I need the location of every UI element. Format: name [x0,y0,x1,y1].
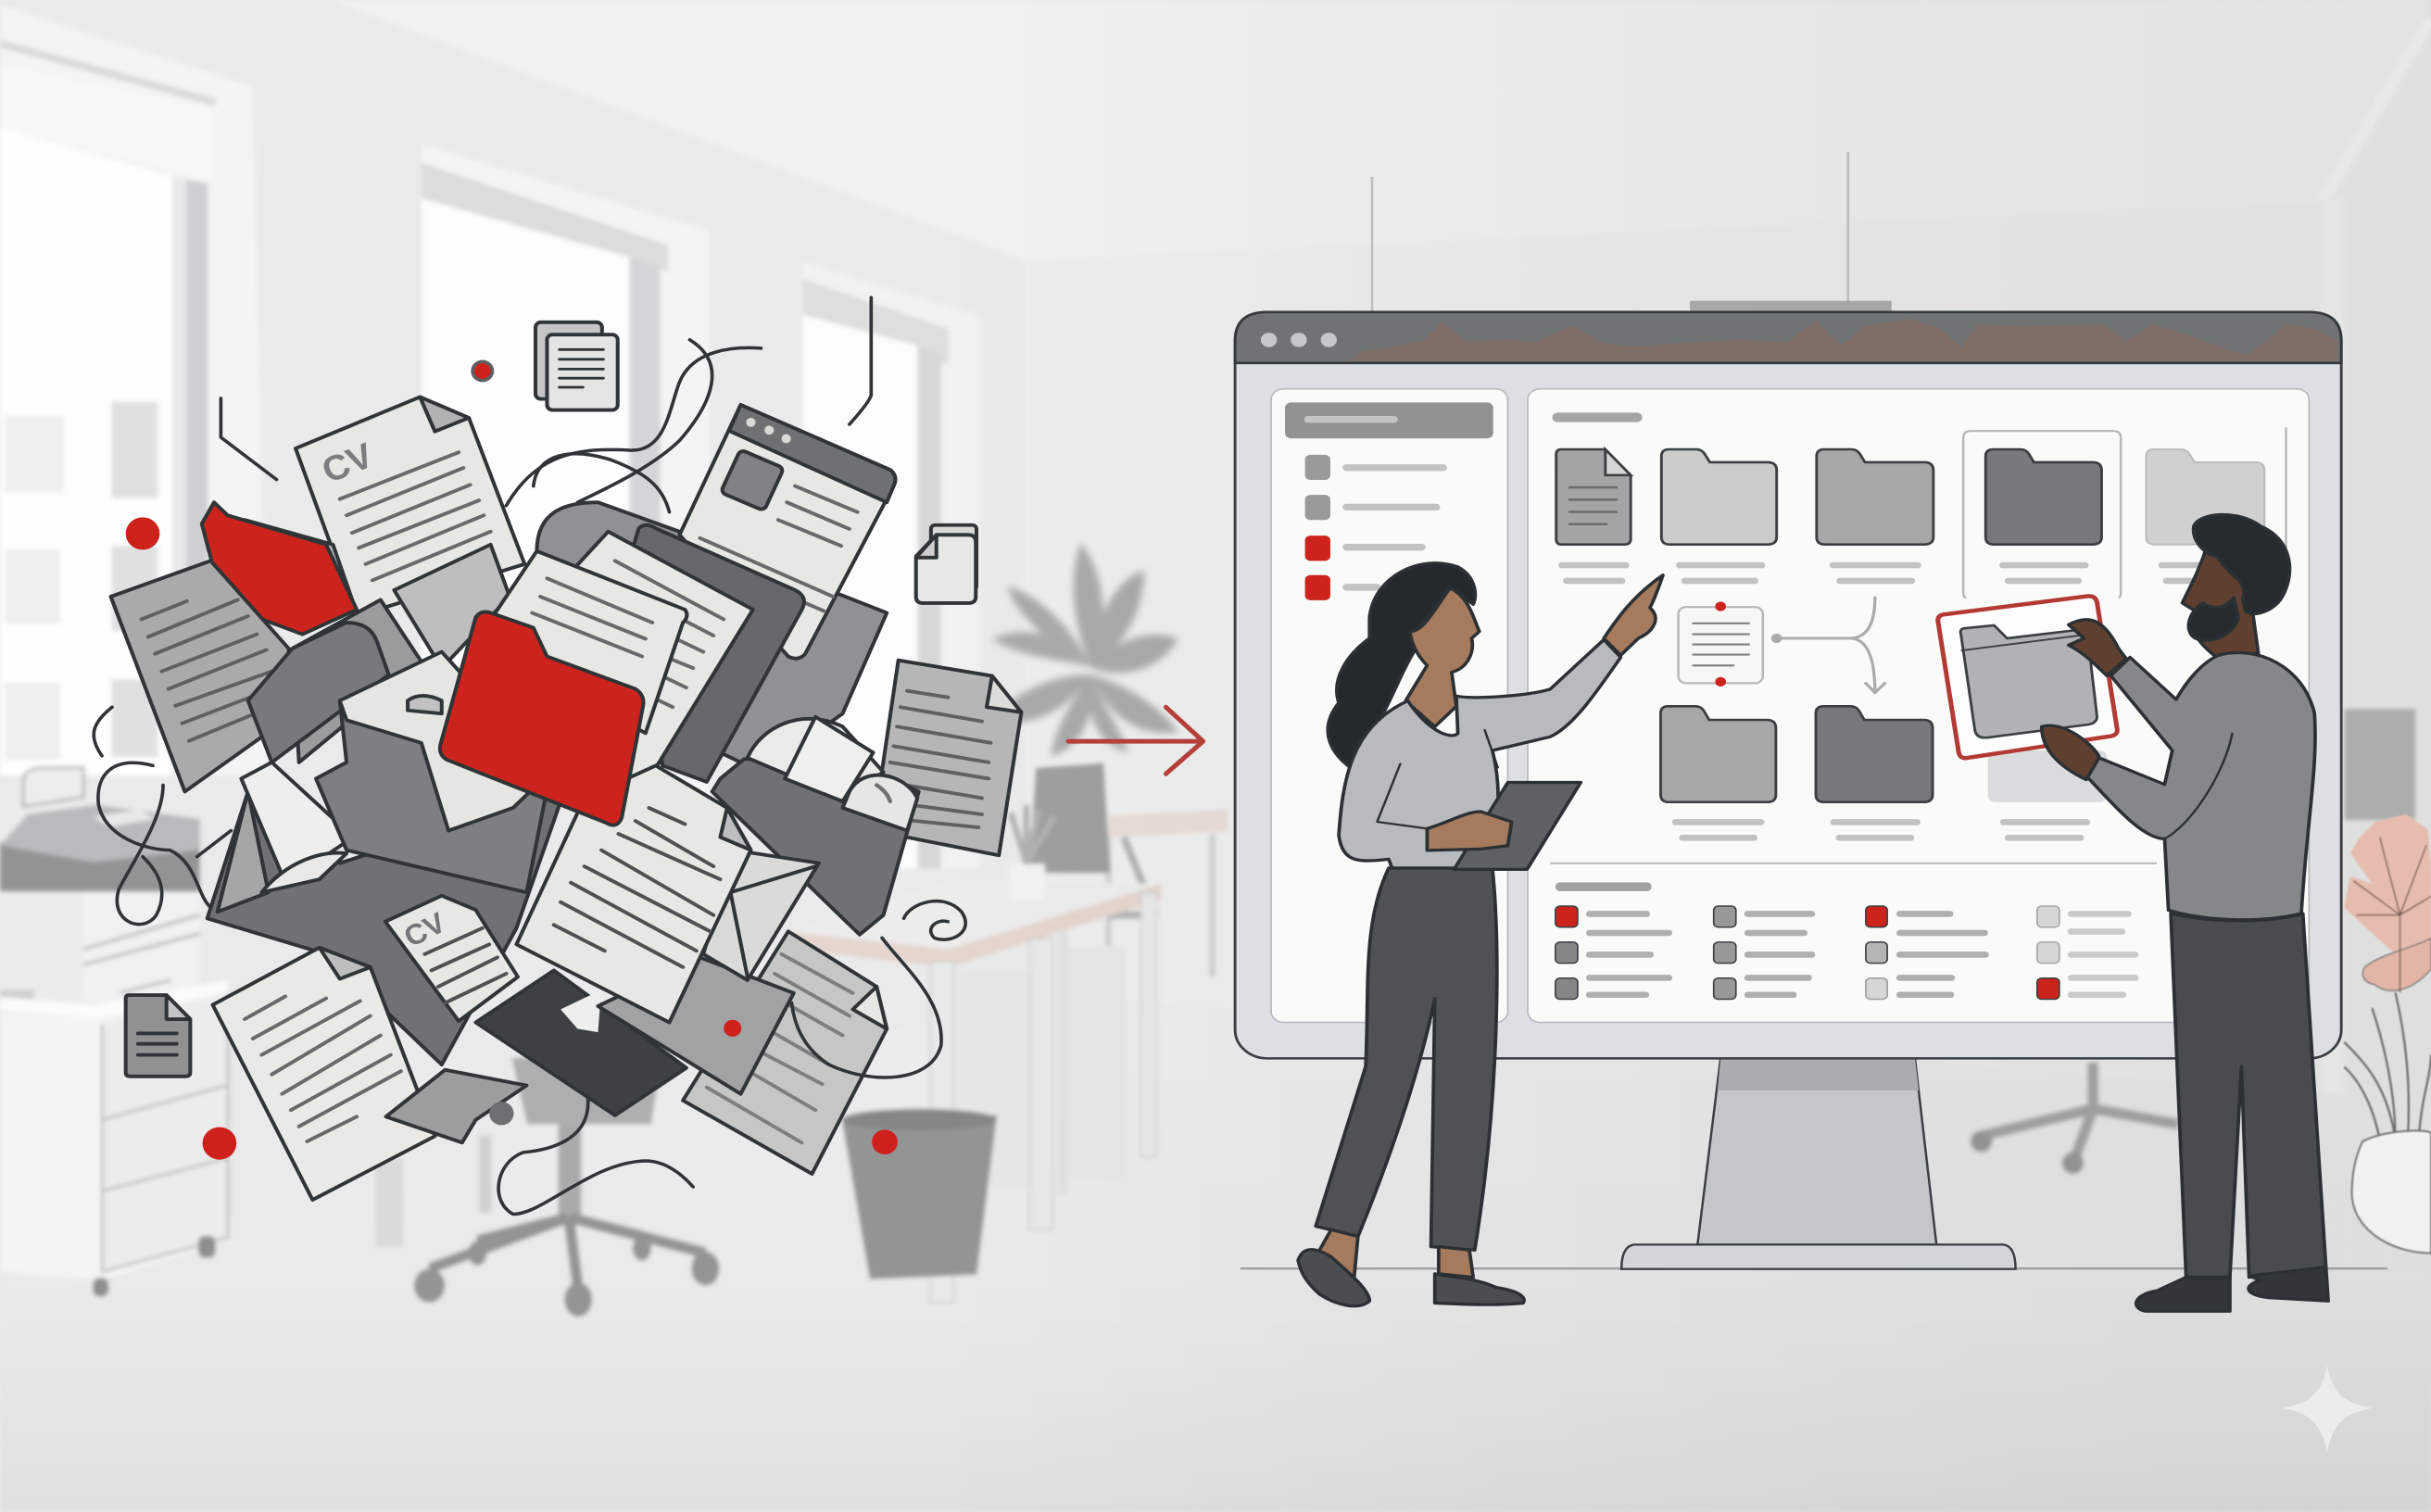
stray lines, front [498,938,941,1215]
grey document, left [111,561,289,791]
man: hands [2042,620,2126,780]
bin [842,1115,997,1279]
folder captions row 2 [1672,819,2090,841]
man: hair [2194,514,2289,613]
file icon [1556,449,1631,545]
small CV document: CV [398,906,451,953]
back grey folder [536,502,887,772]
flow connector with arrow [1773,598,1885,693]
woman: pointing hand [1604,575,1663,655]
monitor stand [1621,1058,2016,1269]
scene: monitor and two people [1235,312,2341,1311]
printer [0,768,200,1002]
large document, bottom left [213,948,435,1200]
icon: double document [535,322,618,410]
woman: shoes [1298,1250,1524,1306]
main panel [1528,389,2309,1022]
man holding folder [2042,514,2328,1311]
icon: grey file [126,995,190,1077]
grey envelope, lower left [208,762,564,1065]
icon: small file [916,525,976,603]
red accent dots [126,360,898,1160]
man: face and neck [2183,547,2259,659]
web page document [679,405,895,659]
man: trousers [2171,914,2326,1278]
woman: ankles [1319,1229,1473,1278]
light text document, front [475,551,686,733]
bottom right document [683,931,887,1174]
tilted text document, rear [506,532,753,818]
far desk and chair [1109,835,1213,977]
right chair [1984,1063,2178,1160]
CV document [296,397,524,616]
sidebar panel [1271,389,1507,1022]
window one [0,5,269,775]
arrow: chaos to order [1068,707,1203,774]
man: beard [2188,598,2238,640]
light document fragment [394,545,510,668]
window noise strip [1350,319,2337,361]
grey open folder, centre [316,652,550,892]
folder captions row 1 [1558,562,2205,584]
dark tablet [632,525,804,782]
woman: tablet [1454,782,1581,869]
dark open folder, right [712,717,919,935]
small CV document [385,896,518,1021]
grey card [598,957,794,1094]
grey cap shape [386,1070,526,1142]
wall screen [2344,709,2415,820]
woman: hair [1328,563,1475,767]
folders row 1 [1661,449,2264,545]
selected folder in red frame [1938,596,2117,758]
woman: sweater [1339,639,1620,872]
right text document [874,661,1021,855]
watermark: four-point sparkle [2282,1365,2372,1453]
envelope, right [703,850,819,980]
woman: trousers [1316,868,1497,1250]
plant: foreground pot with pink leaves [2344,814,2431,1253]
pendants [1372,152,1848,318]
woman: holding hand [1427,812,1512,850]
red folder, back [202,502,357,635]
window three [803,262,980,868]
illustration: chaotic pile of documents [94,297,1021,1215]
man: shoes [2136,1267,2328,1311]
selection outline [1963,431,2121,598]
cabinet [0,980,228,1296]
floor line [1241,1267,2387,1269]
large text document, centre right [516,765,750,1023]
office chair [375,1056,719,1317]
plant [992,543,1178,757]
woman presenting with tablet [1298,563,1663,1306]
desk [789,805,1161,1303]
monitor body [1235,312,2341,1058]
flow document [1679,601,1763,687]
man: ear [2227,581,2242,603]
stray curved lines [94,297,965,939]
window two [422,145,710,806]
folders row 2 [1660,706,1933,802]
black envelope [475,970,686,1115]
woman: face and neck [1405,588,1480,726]
man: sweater [2088,653,2315,920]
lower file list [1556,882,2138,1000]
dark folder, rear left [248,599,422,762]
red folder, front [440,611,643,825]
CV document: CV [316,436,379,491]
